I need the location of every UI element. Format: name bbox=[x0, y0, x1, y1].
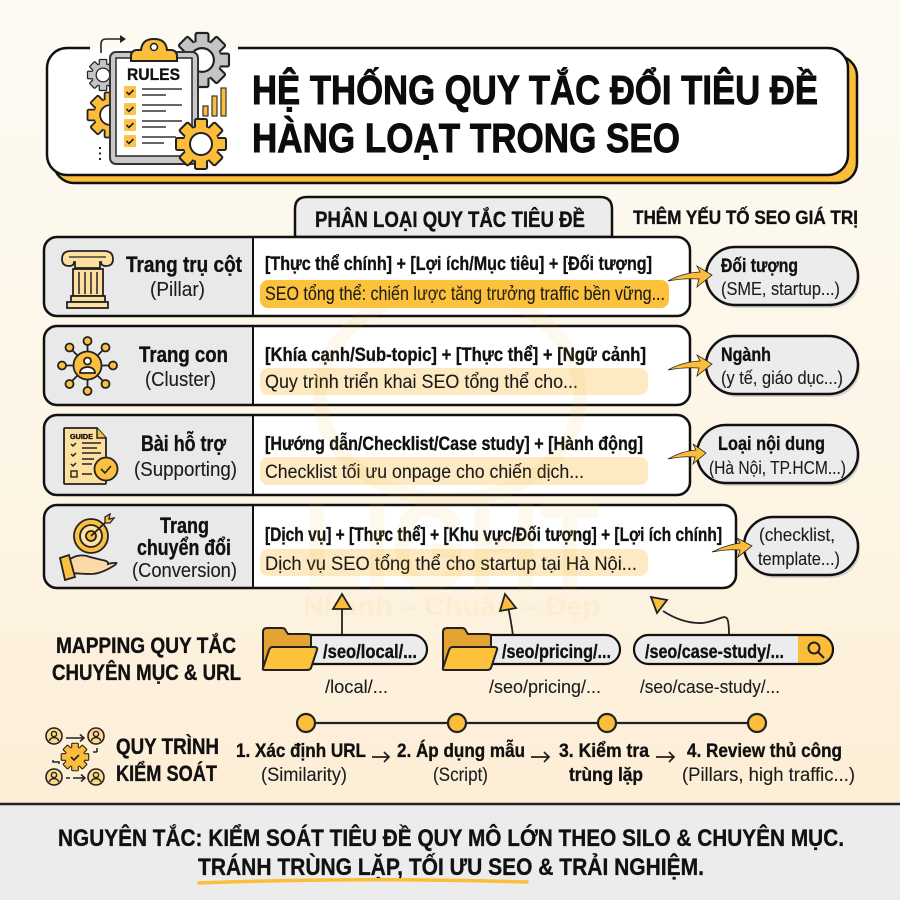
row label: (Conversion) bbox=[132, 559, 237, 582]
url bar: pricing: /seo/pricing/... bbox=[502, 642, 611, 663]
tab heading: title rule categories: PHÂN LOẠI QUY TẮC TIÊU ĐỀ bbox=[315, 207, 585, 232]
example highlight: SEO tổng thể: chiến lược tăng trưởng traffic bền vững... bbox=[265, 283, 665, 305]
row label: Trang trụ cột bbox=[126, 252, 243, 277]
arrow: to industry bbox=[668, 355, 712, 376]
title template: [Dịch vụ] + [Thực thể] + [Khu vực/Đối tượng] + [Lợi ích chính] bbox=[265, 524, 722, 546]
url bar: case study search bbox=[634, 635, 833, 664]
icon: rules clipboard with gears: RULES bbox=[127, 65, 180, 84]
step 3 bbox=[559, 740, 649, 786]
step 1: 1. Xác định URL bbox=[236, 740, 366, 762]
header banner bbox=[47, 48, 857, 183]
row label bbox=[132, 513, 237, 582]
pill: checklist template: template...) bbox=[758, 548, 840, 569]
title template: [Khía cạnh/Sub-topic] + [Thực thể] + [Ngữ cảnh] bbox=[265, 344, 646, 366]
arrow: case study to conversion bbox=[651, 597, 729, 636]
heading: URL mapping: CHUYÊN MỤC & URL bbox=[52, 660, 241, 685]
process timeline bbox=[297, 714, 766, 732]
heading: control process: KIỂM SOÁT bbox=[116, 761, 217, 786]
row label: chuyển đổi bbox=[137, 535, 231, 560]
heading: URL mapping: MAPPING QUY TẮC bbox=[56, 633, 236, 658]
row label: (Supporting) bbox=[134, 458, 237, 481]
watermark: LIGHT bbox=[303, 478, 600, 617]
row label bbox=[126, 252, 243, 301]
url labels bbox=[325, 676, 780, 697]
row label bbox=[139, 342, 228, 391]
arrow: to content type bbox=[668, 444, 706, 464]
step 1: (Similarity) bbox=[261, 765, 347, 786]
url labels: /seo/case-study/... bbox=[640, 676, 780, 697]
url labels: /local/... bbox=[325, 676, 388, 697]
url bar: local: /seo/local/... bbox=[323, 642, 417, 663]
example highlight: Quy trình triển khai SEO tổng thể cho... bbox=[265, 371, 578, 393]
step 4 bbox=[682, 740, 855, 786]
icon: rules clipboard with gears bbox=[88, 33, 229, 169]
url bar: local bbox=[263, 628, 427, 670]
icon: control workflow bbox=[46, 728, 104, 785]
row label: Trang bbox=[160, 513, 209, 538]
footer principle band: TRÁNH TRÙNG LẶP, TỐI ƯU SEO & TRẢI NGHIỆM. bbox=[198, 852, 704, 881]
row: conversion bbox=[44, 505, 736, 588]
title template: [Hướng dẫn/Checklist/Case study] + [Hành động] bbox=[265, 431, 643, 455]
step 2: (Script) bbox=[433, 765, 488, 786]
icon: column bbox=[62, 251, 113, 308]
icon: guide document bbox=[64, 428, 118, 484]
step 2 bbox=[397, 738, 525, 786]
pill: content type bbox=[697, 425, 860, 486]
example highlight bbox=[260, 280, 669, 308]
url labels: /seo/pricing/... bbox=[489, 676, 601, 697]
heading: URL mapping bbox=[52, 633, 241, 685]
row: pillar bbox=[44, 237, 690, 316]
pill: industry bbox=[706, 336, 860, 397]
icon: folder bbox=[263, 628, 317, 670]
pill: industry: (y tế, giáo dục...) bbox=[721, 367, 843, 388]
row: cluster bbox=[44, 326, 690, 405]
underline bbox=[199, 880, 527, 883]
title template: [Thực thể chính] + [Lợi ích/Mục tiêu] + [Đối tượng] bbox=[265, 253, 652, 275]
step 3: 3. Kiểm tra bbox=[559, 740, 649, 762]
arrow: step 2 to 3 bbox=[531, 752, 549, 762]
example highlight: Checklist tối ưu onpage cho chiến dịch... bbox=[265, 461, 584, 483]
pill: audience bbox=[706, 247, 860, 308]
step 2: 2. Áp dụng mẫu bbox=[397, 738, 525, 762]
arrow: pricing to conversion bbox=[500, 594, 516, 636]
step 4: 4. Review thủ công bbox=[687, 740, 842, 762]
footer principle band bbox=[0, 804, 900, 900]
icon: magnifier bbox=[808, 642, 824, 658]
arrow: local to conversion bbox=[333, 594, 351, 636]
example highlight: Dịch vụ SEO tổng thể cho startup tại Hà Nội... bbox=[265, 553, 637, 575]
watermark: Nhanh – Chuẩn – Đẹp bbox=[303, 591, 600, 621]
row label: (Cluster) bbox=[145, 368, 216, 391]
row label: (Pillar) bbox=[150, 278, 205, 301]
watermark bbox=[303, 290, 600, 621]
arrow: to checklist template bbox=[712, 538, 752, 557]
pill: audience: (SME, startup...) bbox=[721, 278, 840, 299]
title bbox=[252, 66, 818, 161]
pill: checklist template bbox=[744, 517, 860, 578]
arrow: to audience bbox=[668, 266, 712, 287]
icon: network bbox=[58, 337, 117, 395]
pill: content type: (Hà Nội, TP.HCM...) bbox=[709, 457, 846, 478]
icon: folder bbox=[443, 628, 497, 670]
pill: checklist template: (checklist, bbox=[759, 524, 835, 545]
pill: audience: Đối tượng bbox=[721, 255, 798, 277]
row label: Trang con bbox=[139, 342, 228, 367]
arrow: step 3 to 4 bbox=[656, 752, 674, 762]
heading: control process: QUY TRÌNH bbox=[116, 734, 219, 759]
heading: control process bbox=[116, 734, 219, 786]
step 3: trùng lặp bbox=[569, 764, 643, 786]
arrow: step 1 to 2 bbox=[372, 752, 389, 762]
title: HÀNG LOẠT TRONG SEO bbox=[252, 115, 680, 161]
url bar: case study search: /seo/case-study/... bbox=[645, 642, 784, 663]
row label: Bài hỗ trợ bbox=[141, 431, 226, 456]
step 4: (Pillars, high traffic...) bbox=[682, 765, 855, 786]
icon: target in hand bbox=[60, 514, 116, 580]
url bar: pricing bbox=[443, 628, 620, 670]
tab heading: title rule categories bbox=[295, 197, 612, 237]
heading: added SEO value: THÊM YẾU TỐ SEO GIÁ TRỊ bbox=[633, 207, 858, 229]
row label bbox=[134, 431, 237, 481]
pill: content type: Loại nội dung bbox=[718, 433, 825, 455]
row: supporting bbox=[44, 415, 690, 495]
step 1 bbox=[236, 740, 366, 786]
icon: guide document: GUIDE bbox=[70, 432, 93, 441]
pill: industry: Ngành bbox=[721, 344, 771, 366]
